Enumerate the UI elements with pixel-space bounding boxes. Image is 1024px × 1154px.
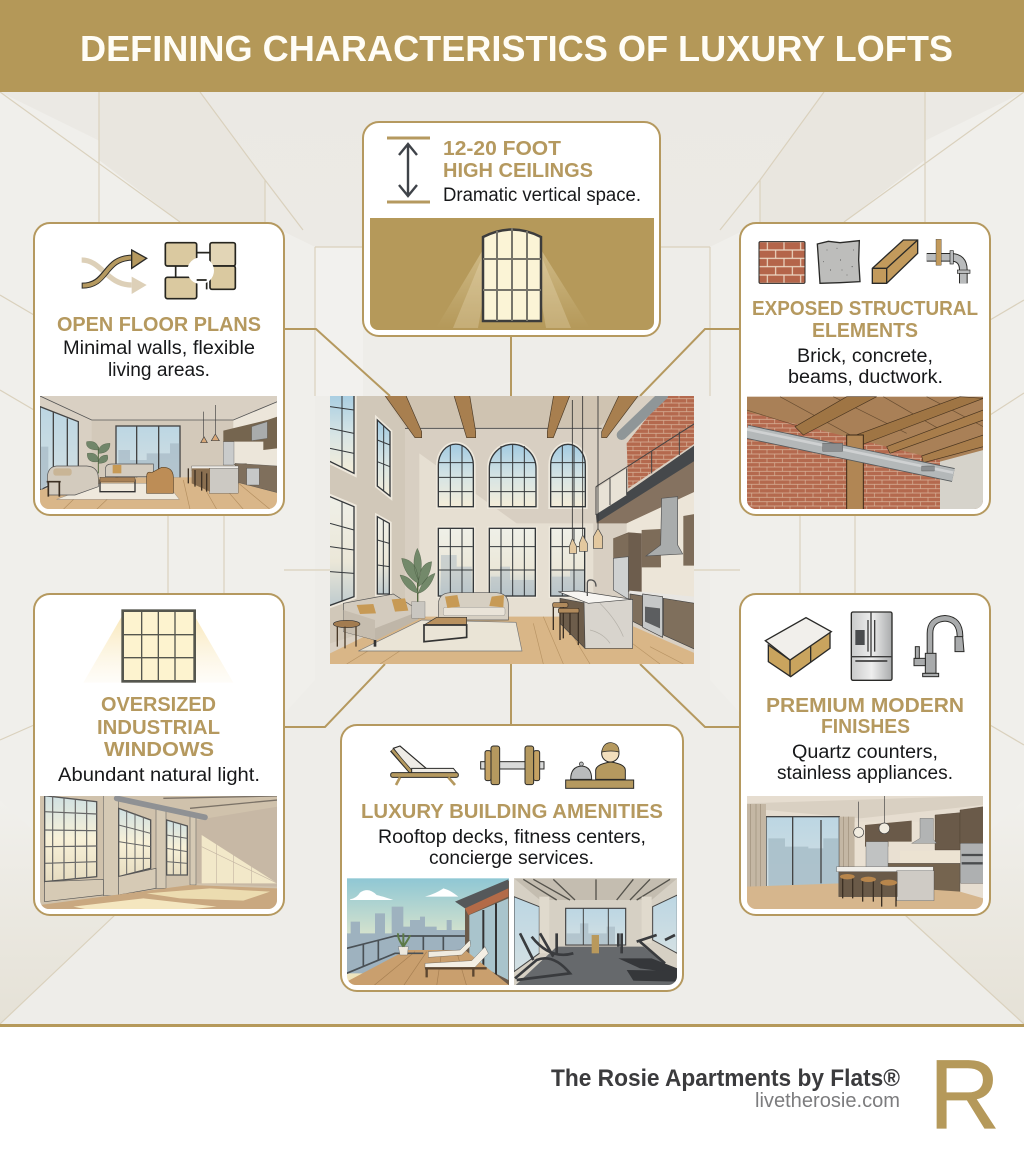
illustration: modern kitchen (747, 796, 983, 909)
ceiling (384, 396, 642, 428)
left wall windows (328, 390, 390, 606)
heading: LUXURY BUILDING AMENITIES (361, 801, 663, 823)
footer (0, 1024, 1024, 1154)
heading: 12-20 FOOT (443, 138, 561, 160)
sofa centre (438, 593, 508, 620)
connector lines (284, 329, 740, 727)
icon: brick, concrete, beam and pipe (759, 239, 970, 283)
heading: ELEMENTS (812, 320, 918, 342)
text: description: Quartz counters, (792, 742, 938, 763)
potted plant (400, 548, 435, 618)
header band (0, 0, 1024, 92)
text: brand name: The Rosie Apartments by Flats® (551, 1065, 900, 1092)
heading (97, 694, 220, 761)
icon: lounger, dumbbell and concierge (391, 743, 634, 788)
icon: ceiling height arrow (387, 138, 430, 202)
text: description: beams, ductwork. (788, 367, 943, 388)
arched windows (438, 444, 585, 507)
logo: R: R (929, 1039, 1000, 1149)
heading (443, 138, 593, 182)
central loft illustration (328, 390, 700, 670)
ceiling beams (383, 393, 640, 438)
text: description (777, 742, 953, 784)
heading: FINISHES (821, 716, 910, 738)
heading (766, 695, 964, 738)
rug (358, 620, 522, 651)
text: description: Rooftop decks, fitness centers, (378, 827, 646, 848)
text: description (63, 338, 255, 381)
illustration: fitness center (514, 878, 677, 987)
side table (333, 620, 360, 648)
back wall with sun patch (405, 428, 602, 616)
panel: luxury building amenities (341, 725, 683, 991)
text: description (378, 827, 646, 869)
text: website: livetherosie.com (755, 1090, 900, 1112)
text: description: Abundant natural light. (58, 765, 260, 786)
title: DEFINING CHARACTERISTICS OF LUXURY LOFTS (80, 28, 953, 69)
pendant lamps (569, 395, 603, 553)
illustration: sunlit empty loft (40, 796, 277, 909)
illustration: rooftop deck (347, 878, 510, 987)
panel: exposed structural elements (740, 223, 990, 515)
mezzanine (596, 423, 695, 523)
exposed brick mezzanine wall (627, 393, 695, 488)
heading: PREMIUM MODERN (766, 695, 964, 717)
coffee table (424, 617, 467, 642)
heading: WINDOWS (104, 739, 214, 761)
bar stools (553, 603, 579, 645)
icon: window with light rays (83, 611, 233, 683)
wood floor (330, 617, 695, 664)
panel: oversized industrial windows (34, 594, 284, 915)
text: description: stainless appliances. (777, 763, 953, 784)
heading: EXPOSED STRUCTURAL (752, 298, 978, 320)
illustration: brick, beams and ductwork (747, 397, 983, 510)
illustration: open plan living room (40, 396, 277, 509)
panel: high ceilings (363, 122, 660, 336)
heading (752, 298, 978, 342)
text: description (788, 346, 943, 388)
panel: premium modern finishes (740, 594, 990, 915)
ductwork (622, 395, 663, 435)
heading: OPEN FLOOR PLANS (57, 314, 261, 336)
panel: open floor plans (34, 223, 284, 515)
heading: INDUSTRIAL (97, 717, 220, 739)
text: description: living areas. (108, 360, 210, 381)
kitchen island (558, 580, 633, 648)
text: description: Brick, concrete, (797, 346, 933, 367)
sofa left (343, 594, 418, 647)
left wall (330, 390, 405, 643)
kitchen wall and cabinets (613, 492, 695, 649)
icon: counter, refrigerator and faucet (765, 612, 964, 680)
illustration: arched window on gold wall (370, 218, 654, 330)
text: description: concierge services. (429, 848, 594, 869)
text: description: Minimal walls, flexible (63, 338, 255, 359)
tall lower windows (438, 528, 585, 596)
heading: HIGH CEILINGS (443, 160, 593, 182)
heading: OVERSIZED (101, 694, 216, 716)
text: description: Dramatic vertical space. (443, 185, 641, 206)
icon: crossing arrows and floor plan (82, 243, 235, 299)
